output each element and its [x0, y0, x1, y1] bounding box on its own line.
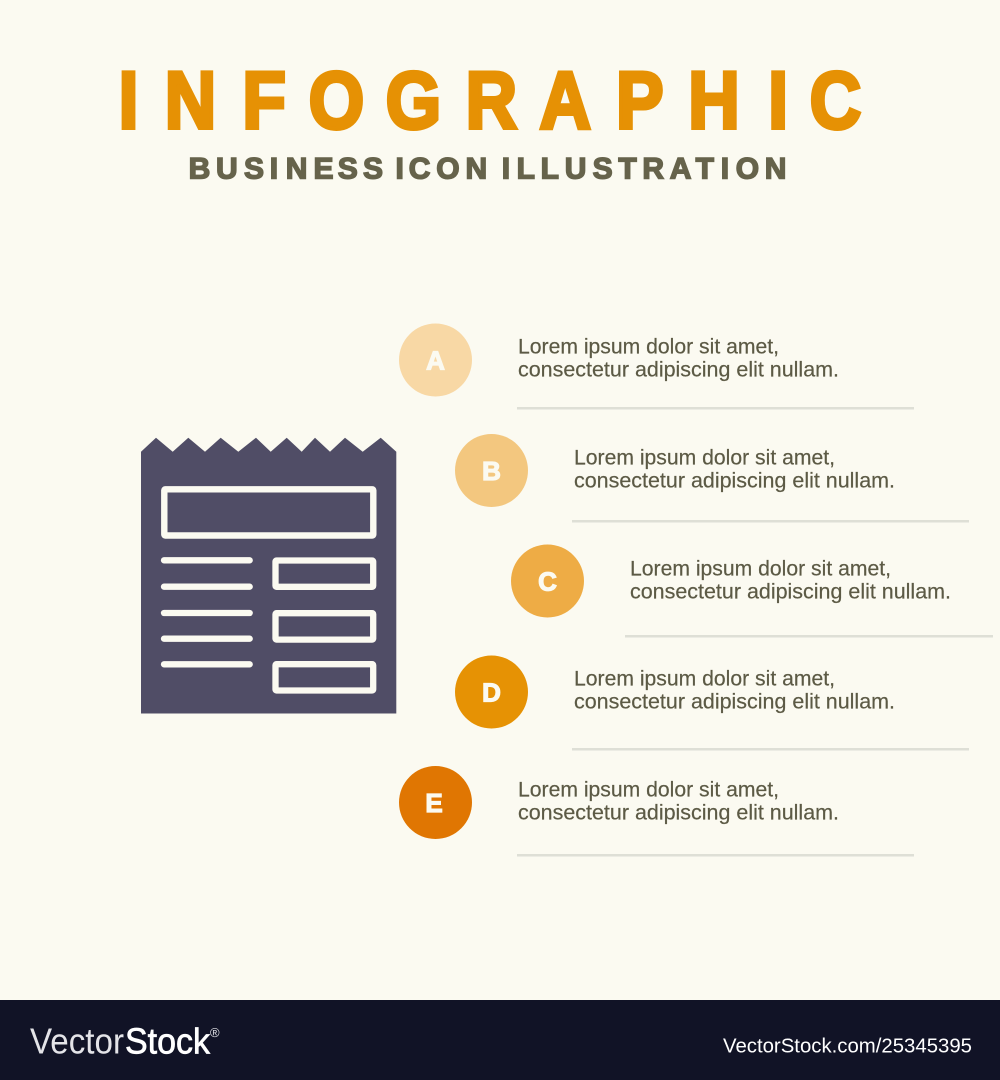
- subtitle: BUSINESS ICON ILLUSTRATION: [189, 152, 786, 186]
- item E: Lorem ipsum dolor sit amet,: [518, 777, 779, 801]
- item D: Lorem ipsum dolor sit amet,: [574, 666, 835, 690]
- footer bar: [0, 1000, 1000, 1080]
- item B: B: [482, 456, 501, 486]
- item C: C: [538, 566, 557, 596]
- item A: A: [426, 346, 445, 376]
- item D: D: [482, 678, 501, 708]
- item C: [511, 544, 993, 638]
- footer logo: ®: [210, 1025, 220, 1040]
- item B: [455, 434, 969, 522]
- item C: consectetur adipiscing elit nullam.: [630, 579, 951, 603]
- footer logo: Stock: [125, 1020, 211, 1061]
- item D: consectetur adipiscing elit nullam.: [574, 689, 895, 713]
- item D: [455, 656, 969, 750]
- item A: Lorem ipsum dolor sit amet,: [518, 334, 779, 358]
- item C: Lorem ipsum dolor sit amet,: [630, 556, 891, 580]
- item A: [399, 324, 914, 410]
- item E: [399, 766, 914, 856]
- footer url: VectorStock.com/25345395: [723, 1036, 972, 1058]
- title: INFOGRAPHIC: [119, 56, 861, 146]
- footer logo: Vector: [30, 1020, 124, 1061]
- item E: consectetur adipiscing elit nullam.: [518, 800, 839, 824]
- footer logo: [30, 1020, 220, 1061]
- icon: document receipt: [141, 438, 396, 714]
- item B: consectetur adipiscing elit nullam.: [574, 468, 895, 492]
- item A: consectetur adipiscing elit nullam.: [518, 357, 839, 381]
- item B: Lorem ipsum dolor sit amet,: [574, 445, 835, 469]
- item E: E: [425, 788, 443, 818]
